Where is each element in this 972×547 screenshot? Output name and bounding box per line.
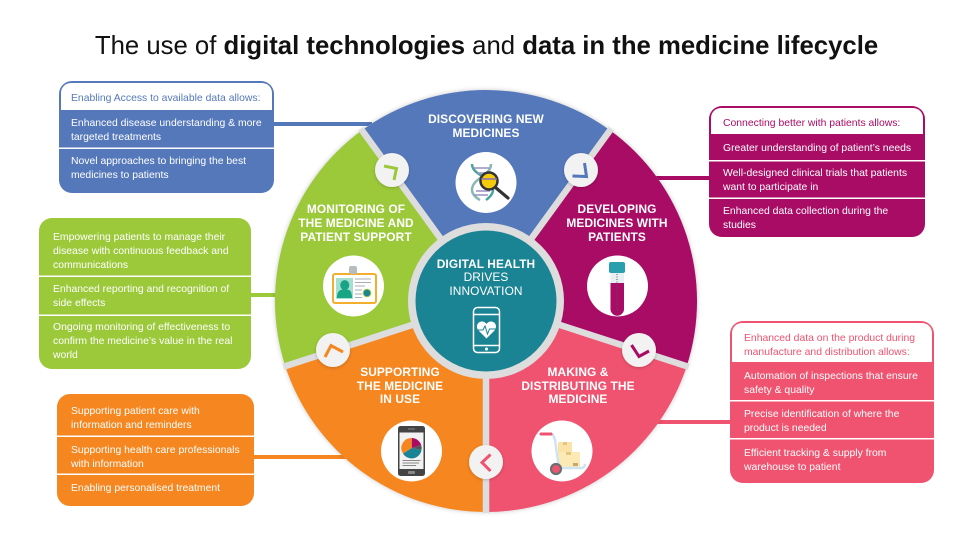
panel: empowering patients: side effects [53,298,105,309]
icon: trolley with boxes [532,420,592,482]
panel: enhanced data: Efficient tracking & supply from [744,448,886,459]
panel: connecting better: want to participate in [722,182,819,193]
panel: enhanced data: product is needed [744,423,827,434]
wheel [275,90,697,513]
heading: supporting: IN USE [380,392,420,406]
panel: enhanced data: Precise identification of where the [744,409,900,420]
heading: developing: MEDICINES WITH [566,216,668,230]
heading: developing: DEVELOPING [578,202,656,216]
heading: discovering: DISCOVERING NEW [428,112,544,126]
connector: blue [272,122,372,126]
segment: supporting [285,301,486,512]
segment: developing [486,130,697,366]
panel: connecting better: Greater understanding of patient’s needs [723,143,911,154]
panel: supporting patient care: information and reminders [71,420,192,431]
heading: supporting: SUPPORTING [360,365,440,379]
heading: monitoring: THE MEDICINE AND [298,216,414,230]
panel: empowering patients: confirm the medicine’s value in the real [53,336,232,347]
panel: supporting patient care: Supporting health care professionals [71,445,240,456]
segment: monitoring [275,130,486,366]
panel: empowering patients: communications [53,260,128,271]
panel: supporting patient care: Enabling personalised treatment [71,483,220,494]
heading: centre: DRIVES [464,270,508,284]
heading: supporting: THE MEDICINE [357,379,443,393]
panel: enhanced data: manufacture and distribution allows: [744,347,910,358]
nav: chevron discovering to developing [564,153,598,187]
nav: chevron supporting to monitoring [316,333,350,367]
panel: enabling access: Novel approaches to bringing the best [71,156,246,167]
heading: developing: PATIENTS [588,230,646,244]
title: The use of digital technologies and data in the medicine lifecycle [95,32,878,60]
heading: monitoring: MONITORING OF [307,202,405,216]
panel: enhanced data [730,321,934,483]
connector: orange [252,455,352,459]
segment: making [486,301,687,512]
panel: enabling access [59,81,274,193]
panel: connecting better: studies [723,220,756,231]
nav: chevron monitoring to discovering [375,153,409,187]
panel: empowering patients: world [52,350,78,361]
panel: enhanced data: Automation of inspections that ensure [744,371,918,382]
panel: empowering patients: disease with continuous feedback and [53,246,229,257]
panel: enabling access: Enhanced disease understanding & more [71,118,262,129]
panel: empowering patients: Ongoing monitoring of effectiveness to [53,322,230,333]
panel: supporting patient care [57,394,254,506]
panel: enabling access: medicines to patients [71,170,169,181]
panel: empowering patients [39,218,251,369]
nav: chevron making to supporting [469,445,503,479]
connector: pink [650,420,732,424]
connector: green [249,293,281,297]
connector: magenta [650,176,711,180]
icon: smartphone with heart [474,308,500,352]
panel: enabling access: Enabling Access to available data allows: [71,93,260,104]
heading: centre: INNOVATION [449,284,523,298]
panel: supporting patient care: Supporting patient care with [71,406,200,417]
panel: supporting patient care: with information [70,459,144,470]
panel: empowering patients: Enhanced reporting and recognition of [53,284,229,295]
panel: enabling access: targeted treatments [71,132,161,143]
panel: enhanced data: safety & quality [744,385,815,396]
panel: connecting better: Well-designed clinical trials that patients [723,168,907,179]
heading: making: MAKING & [548,365,608,379]
heading: centre: DIGITAL HEALTH [437,257,535,271]
panel: empowering patients: Empowering patients to manage their [53,232,226,243]
heading: discovering: MEDICINES [453,126,519,140]
icon: DNA and magnifier [456,152,516,213]
panel: enhanced data: Enhanced data on the product during [744,333,915,344]
heading: making: DISTRIBUTING THE [521,379,635,393]
icon: id badge [323,256,384,316]
nav: chevron developing to making [622,333,656,367]
panel: connecting better: Enhanced data collection during the [723,206,888,217]
panel: enhanced data: warehouse to patient [743,462,841,473]
icon: phone with pie chart [381,420,442,482]
heading: monitoring: PATIENT SUPPORT [300,230,412,244]
panel: connecting better [709,106,925,237]
icon: test tube [587,256,648,316]
panel: connecting better: Connecting better with patients allows: [723,118,900,129]
heading: making: MEDICINE [549,392,607,406]
segment: discovering [362,90,610,301]
